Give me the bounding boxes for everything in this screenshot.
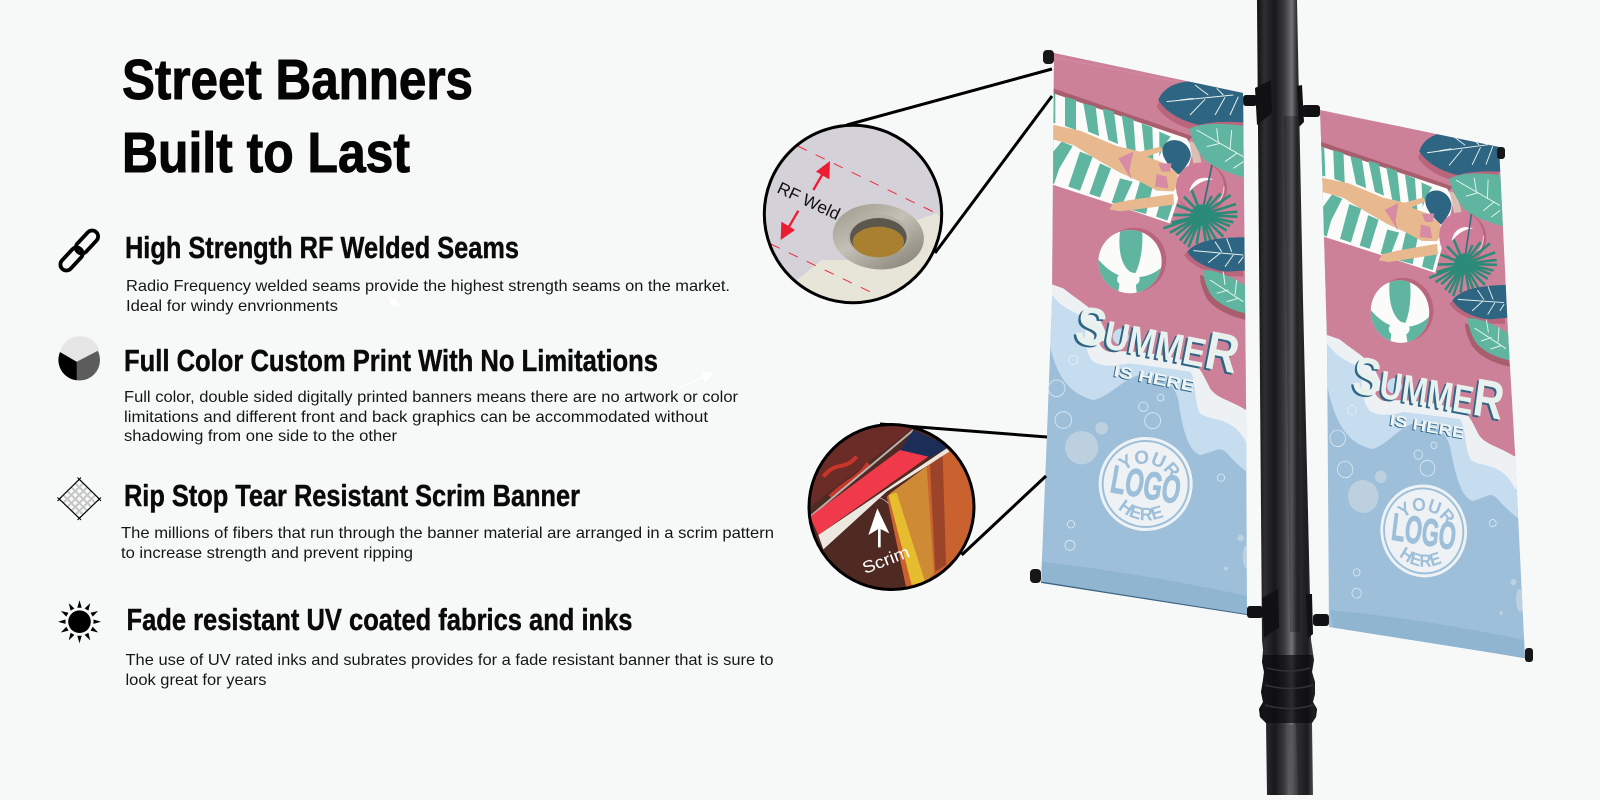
detail photo: welded seam and grommet: [766, 126, 940, 302]
callout leader lines: [847, 69, 1052, 253]
banner text and logo: HERE: [1400, 546, 1442, 567]
heading: UV fade resistant: Fade resistant UV coated fabrics and inks: [126, 602, 632, 637]
title: Street Banners: [122, 48, 473, 112]
callout: scrim detail: [803, 417, 1047, 593]
text: scrim description: The millions of fibers that run through the banner material are arranged in a scrim pattern: [121, 525, 774, 542]
text: UV description: look great for years: [126, 672, 266, 689]
heading: full color print: Full Color Custom Print With No Limitations: [124, 343, 658, 378]
feature: full color print: [58, 336, 739, 445]
icon: chain link: [58, 228, 101, 273]
feature: RF welded seams: [58, 228, 730, 315]
pole brackets: [1243, 80, 1329, 638]
banner text and logo: IS HERE: [1389, 412, 1466, 443]
text: full color description: limitations and different front and back graphics can be accommodated without: [124, 409, 709, 426]
icon: scrim mesh diamond: [58, 478, 101, 520]
banner text and logo: IS HERE: [1387, 412, 1465, 444]
arrow: faint white arrow near second heading: [678, 372, 714, 388]
panel: right street banner: [1320, 110, 1533, 662]
text: UV description: The use of UV rated inks and subrates provides for a fade resistant banner that is sure to: [126, 652, 774, 669]
text: scrim description: to increase strength and prevent ripping: [121, 545, 413, 562]
label: RF Weld: RF Weld: [774, 178, 843, 224]
label: Scrim: Scrim: [860, 542, 912, 578]
banner text and logo: SUMMER: [1349, 344, 1508, 431]
text: RF welded seams description: Ideal for windy envrionments: [126, 298, 338, 315]
text: full color description: [124, 389, 739, 445]
heading: rip stop scrim: Rip Stop Tear Resistant Scrim Banner: [124, 478, 580, 513]
callout leader lines: [880, 424, 1047, 555]
title: Built to Last: [122, 121, 410, 185]
banner text: SUMMER IS HERE: SUMMER: [1071, 295, 1244, 385]
callout: RF weld detail: [763, 69, 1052, 313]
panel: left street banner: [1030, 50, 1247, 615]
banner text and logo: LOGO: [1389, 505, 1459, 558]
feature: rip stop scrim: [58, 478, 774, 562]
banner logo text: [1108, 450, 1184, 520]
banner text: SUMMER IS HERE: IS HERE: [1111, 364, 1195, 396]
text: full color description: shadowing from one side to the other: [124, 428, 398, 445]
banner text: SUMMER IS HERE: SUMMER: [1068, 296, 1242, 387]
banner logo text: HERE: [1118, 500, 1164, 520]
feature: UV fade resistant: [58, 600, 774, 689]
banner text: SUMMER IS HERE: IS HERE: [1112, 363, 1196, 396]
banner text and logo: SUMMER: [1347, 346, 1506, 433]
right banner artwork: [1320, 110, 1525, 658]
text: RF welded seams description: [126, 278, 730, 315]
street pole: [1257, 0, 1317, 795]
icon: color wheel: [58, 336, 100, 380]
arrow: faint white arrow near first description: [385, 293, 401, 307]
icon: sun: [58, 600, 101, 643]
text: UV description: [126, 652, 774, 689]
banner logo text: YOUR: [1117, 450, 1180, 476]
banner text and logo: [1347, 344, 1508, 567]
text: scrim description: [121, 525, 774, 562]
title: [122, 48, 473, 185]
text: full color description: Full color, double sided digitally printed banners means there are no artwork or color: [124, 389, 739, 406]
grommets: [1030, 50, 1054, 583]
grommets: [1497, 147, 1533, 662]
banner text and logo: YOUR: [1396, 498, 1454, 522]
left banner artwork: [1041, 53, 1247, 615]
text: RF welded seams description: Radio Frequency welded seams provide the highest strength seams on the market.: [126, 278, 730, 295]
banner logo text: LOGO: [1108, 458, 1184, 513]
detail photo: torn banner showing scrim: [810, 426, 972, 588]
heading: RF welded seams: High Strength RF Welded Seams: [125, 230, 519, 265]
